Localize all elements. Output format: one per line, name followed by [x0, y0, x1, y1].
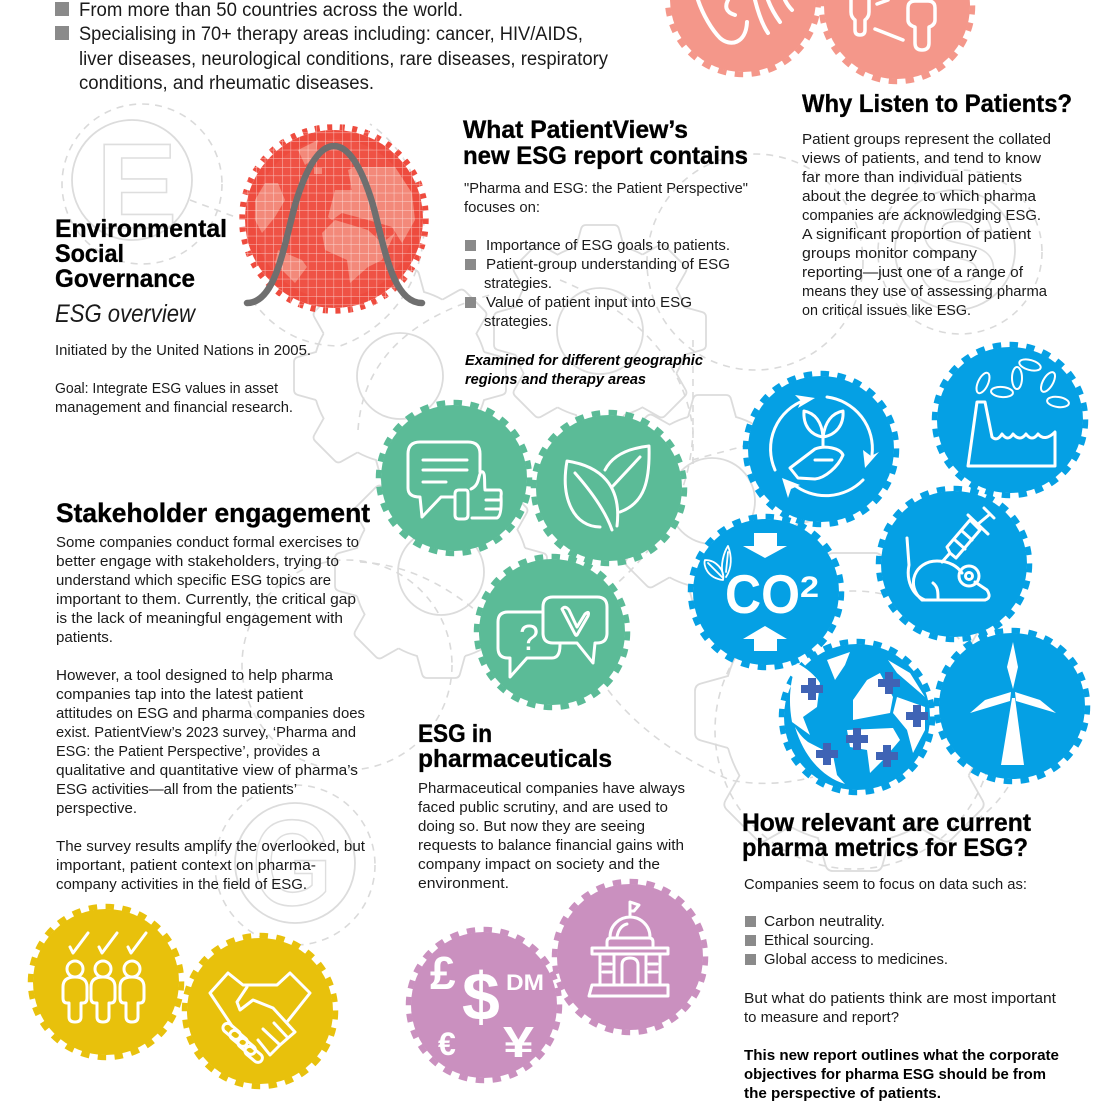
- heading: ESG in: [418, 720, 492, 748]
- body text: is the lack of meaningful engagement with: [56, 610, 343, 627]
- panel: relevance of pharma metrics: [742, 809, 1059, 1102]
- bullet list: Importance of ESG goals to patients.: [486, 237, 730, 254]
- subheading: ESG overview: [55, 300, 197, 328]
- body text: requests to balance financial gains with: [418, 837, 684, 854]
- gear: yellow people with check marks: [30, 906, 182, 1058]
- body text: Some companies conduct formal exercises to: [56, 534, 359, 551]
- emphasis note: regions and therapy areas: [465, 371, 646, 388]
- conclusion text: objectives for pharma ESG should be from: [744, 1066, 1046, 1083]
- body text: [802, 131, 1051, 319]
- intro text: Companies seem to focus on data such as:: [744, 876, 1027, 893]
- heading: Governance: [55, 265, 195, 293]
- intro text: focuses on:: [464, 199, 540, 216]
- body text: attitudes on ESG and pharma companies does: [56, 705, 365, 722]
- body text: far more than individual patients: [802, 169, 1022, 186]
- panel: stakeholder engagement: [56, 498, 370, 893]
- gear: blue CO2 icon: [690, 516, 842, 668]
- panel: why listen to patients: [802, 90, 1072, 319]
- gear: purple currency icon: ¥: [503, 1018, 535, 1067]
- gear: blue plant cycle icon: [746, 374, 896, 524]
- bullet list: [465, 237, 730, 330]
- body text: views of patients, and tend to know: [802, 150, 1041, 167]
- body text: means they use of assessing pharma: [802, 283, 1048, 300]
- gear: purple currency icon: €: [438, 1026, 456, 1062]
- gear: blue globe with medical crosses: [782, 642, 932, 792]
- bullet list: strategies.: [484, 275, 552, 292]
- body text: ESG: the Patient Perspective’, provides a: [56, 743, 321, 760]
- emphasis note: Examined for different geographic: [465, 352, 704, 369]
- bullet list: Global access to medicines.: [764, 951, 948, 968]
- panel: ESG in pharmaceuticals: [418, 720, 685, 892]
- body text: patients.: [56, 629, 113, 646]
- heading: Environmental: [55, 215, 227, 243]
- bullet list: strategies.: [484, 313, 552, 330]
- bullet list: Value of patient input into ESG: [486, 294, 692, 311]
- background: ghost gears and dashed circles: [62, 104, 1042, 945]
- text block: intro bullets: From more than 50 countries across the world.: [79, 0, 463, 21]
- gear: blue wind turbine icon: [936, 630, 1088, 782]
- heading: new ESG report contains: [463, 142, 748, 170]
- body text: A significant proportion of patient: [802, 226, 1032, 243]
- body text: Initiated by the United Nations in 2005.: [55, 342, 311, 359]
- gear: purple currency icon: [408, 930, 560, 1080]
- gear: yellow handshake icon: [184, 936, 336, 1086]
- body text: about the degree to which pharma: [802, 188, 1037, 205]
- body text: perspective.: [56, 800, 137, 817]
- body text: company impact on society and the: [418, 856, 660, 873]
- body text: important, patient context on pharma-: [56, 857, 316, 874]
- text block: intro bullets: [55, 0, 608, 94]
- body text: important to them. Currently, the critical gap: [56, 591, 356, 608]
- background: ghost gears and dashed circles: S: [917, 184, 998, 320]
- body text: company activities in the field of ESG.: [56, 876, 307, 893]
- body text: Goal: Integrate ESG values in asset: [55, 380, 279, 397]
- conclusion text: This new report outlines what the corporate: [744, 1047, 1059, 1064]
- heading: pharma metrics for ESG?: [742, 834, 1028, 862]
- gear: blue lab mouse and syringe icon: [878, 488, 1030, 640]
- gear: green question and answer icon: [476, 556, 628, 708]
- body text: faced public scrutiny, and are used to: [418, 799, 668, 816]
- heading: pharmaceuticals: [418, 745, 612, 773]
- heading: What PatientView’s: [463, 116, 688, 144]
- question text: [744, 990, 1057, 1026]
- body text: groups monitor company: [802, 245, 978, 262]
- heading: [742, 809, 1032, 862]
- question text: But what do patients think are most important: [744, 990, 1057, 1007]
- bullet list: Patient-group understanding of ESG: [486, 256, 730, 273]
- gear: green question and answer icon: ?: [519, 617, 539, 658]
- body text: However, a tool designed to help pharma: [56, 667, 334, 684]
- body text: ESG activities—all from the patients’: [56, 781, 297, 798]
- background: ghost gears and dashed circles: E: [96, 118, 177, 254]
- emphasis note: [465, 352, 704, 388]
- body text: [56, 534, 366, 893]
- body text: reporting—just one of a range of: [802, 264, 1024, 281]
- body text: [418, 780, 685, 892]
- heading: [418, 720, 612, 773]
- bullet list: [745, 913, 948, 968]
- body text: companies are acknowledging ESG.: [802, 207, 1041, 224]
- conclusion text: [744, 1047, 1059, 1102]
- body text: environment.: [418, 875, 509, 892]
- bullet list: Ethical sourcing.: [764, 932, 874, 949]
- text block: intro bullets: conditions, and rheumatic diseases.: [79, 73, 374, 94]
- body text: [55, 342, 311, 416]
- panel: ESG overview: [55, 215, 311, 416]
- body text: doing so. But now they are seeing: [418, 818, 645, 835]
- question text: to measure and report?: [744, 1009, 899, 1026]
- heading: Why Listen to Patients?: [802, 90, 1072, 118]
- medical crosses: [801, 672, 928, 767]
- text block: intro bullets: Specialising in 70+ therapy areas including: cancer, HIV/AIDS,: [79, 24, 583, 45]
- body text: Patient groups represent the collated: [802, 131, 1051, 148]
- body text: exist. PatientView’s 2023 survey, ‘Pharma and: [56, 724, 356, 741]
- intro text: [464, 180, 748, 216]
- bell curve: [247, 146, 422, 303]
- gear: red globe with bell curve: [238, 123, 430, 315]
- gear: purple currency icon: DM: [506, 970, 544, 995]
- body text: better engage with stakeholders, trying to: [56, 553, 339, 570]
- body text: understand which specific ESG topics are: [56, 572, 331, 589]
- gear: green feedback icon: [378, 402, 530, 554]
- body text: qualitative and quantitative view of pharma’s: [56, 762, 358, 779]
- gear: purple currency icon: £: [430, 947, 456, 999]
- heading: [463, 116, 748, 170]
- bullet list: Carbon neutrality.: [764, 913, 885, 930]
- conclusion text: the perspective of patients.: [744, 1085, 941, 1102]
- gear: blue CO2 icon: CO: [725, 563, 800, 625]
- body text: companies tap into the latest patient: [56, 686, 304, 703]
- body text: management and financial research.: [55, 399, 293, 416]
- gear: blue factory icon: [934, 344, 1086, 496]
- gear: purple government building icon: [554, 882, 706, 1032]
- intro text: "Pharma and ESG: the Patient Perspective": [464, 180, 748, 197]
- gear: salmon ear icon: [668, 0, 818, 74]
- heading: [55, 215, 227, 293]
- gear: blue CO2 icon: 2: [800, 571, 819, 604]
- body text: The survey results amplify the overlooked, but: [56, 838, 366, 855]
- heading: Stakeholder engagement: [56, 498, 370, 528]
- gear: green leaves icon: [534, 412, 684, 564]
- background: ghost gears and dashed circles: G: [252, 795, 332, 931]
- text block: intro bullets: liver diseases, neurological conditions, rare diseases, respiratory: [79, 49, 608, 70]
- panel: what the report contains: [463, 116, 748, 388]
- gear: purple currency icon: $: [462, 959, 500, 1035]
- heading: Social: [55, 240, 124, 268]
- gear: salmon data icon: [822, 0, 972, 82]
- body text: Pharmaceutical companies have always: [418, 780, 685, 797]
- heading: How relevant are current: [742, 809, 1032, 837]
- body text: on critical issues like ESG.: [802, 302, 971, 319]
